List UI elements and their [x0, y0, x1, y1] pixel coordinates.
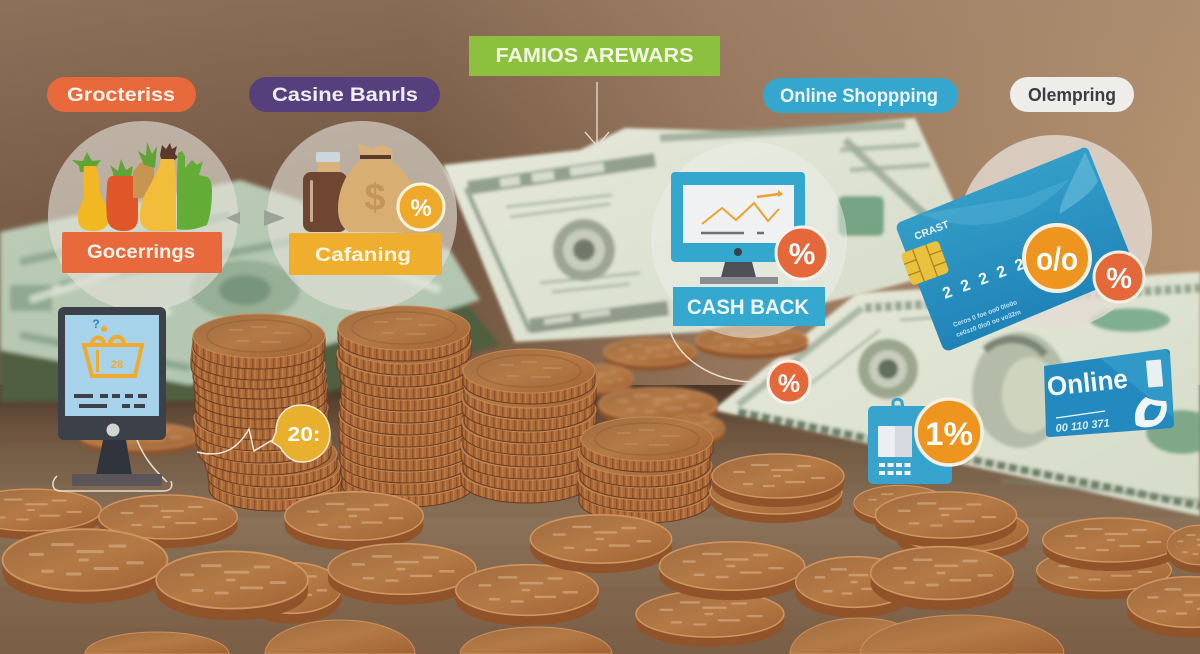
- credit card: Ceros 0 foe oo0 0lo0o: [952, 299, 1018, 329]
- icon: jar: [303, 152, 347, 232]
- badge: large percent: [1024, 225, 1090, 291]
- heading banner: [469, 36, 720, 76]
- wooden wall background: [0, 0, 1200, 420]
- icon: basket: ?: [92, 317, 100, 331]
- arrow: banner to bills: [585, 82, 609, 146]
- coin stack 2: [337, 306, 474, 507]
- label: gocerrings: Gocerrings: [87, 242, 195, 263]
- dollar bill: lower right: [713, 272, 1200, 516]
- pill: casino banks: [249, 77, 440, 112]
- small coin stack: [710, 454, 844, 523]
- online card: [1044, 349, 1174, 437]
- label: cafaning: Cafaning: [315, 245, 411, 266]
- pill: groceries: [47, 77, 196, 112]
- callout: coin price bubble: 20:: [288, 424, 320, 446]
- coin stack 1: [191, 314, 341, 511]
- credit card: ce0sz0 0lo0 oo vo32m: [955, 309, 1022, 339]
- icon: calculator with 1% badge: [868, 399, 982, 484]
- panel: groceries circle: [48, 121, 238, 311]
- badge: 1 percent: 1%: [925, 416, 973, 452]
- pill: olempring: Olempring: [1028, 85, 1116, 105]
- label: cash back: [673, 287, 825, 326]
- arrows between circles: [226, 210, 285, 226]
- label: cafaning: [289, 233, 442, 275]
- icon: basket: [84, 317, 142, 376]
- callout: coin price bubble: [197, 405, 330, 462]
- badge: percent: [398, 184, 444, 230]
- badge: red percent: %: [1106, 263, 1132, 295]
- icon: basket: 28: [111, 359, 123, 371]
- credit card: CRAST: [913, 218, 951, 243]
- loose coins: [0, 485, 1200, 654]
- badge: percent: [776, 227, 828, 279]
- online card: Online: [1045, 364, 1129, 402]
- panel: casino circle: [267, 121, 457, 311]
- icon: money bag: $: [364, 177, 386, 219]
- panel: credit card circle: [897, 135, 1152, 350]
- badge: red percent: [1094, 252, 1144, 302]
- badge: percent: %: [410, 195, 432, 222]
- coin stack 4: [578, 417, 713, 523]
- coin stack 3: [461, 349, 596, 503]
- credit card: 2 2 2 2 2 2 2: [940, 241, 1066, 303]
- credit card: [897, 148, 1135, 350]
- background blurred coins: [81, 327, 808, 455]
- label: cash back: CASH BACK: [687, 296, 809, 319]
- pill: groceries: Grocteriss: [67, 85, 175, 106]
- badge: percent small: [768, 361, 810, 403]
- icon: shopping monitor: [53, 307, 172, 491]
- icon: vegetables: [72, 142, 212, 231]
- label: gocerrings: [62, 232, 222, 273]
- badge: percent small: %: [778, 370, 800, 398]
- dollar bill: left: [0, 180, 500, 402]
- card chip: [900, 240, 950, 286]
- online card: 00 110 371: [1055, 417, 1110, 435]
- panel: cash back circle: [651, 142, 847, 382]
- wooden table: [0, 385, 1200, 654]
- monitor text lines: [74, 396, 147, 406]
- icon: money bag: [338, 144, 417, 232]
- pill: olempring: [1010, 77, 1134, 112]
- pill: online shopping: Online Shoppping: [780, 86, 938, 107]
- badge: large percent: o/o: [1036, 241, 1078, 277]
- badge: percent: %: [789, 238, 815, 271]
- pill: casino banks: Casine Banrls: [272, 85, 418, 106]
- heading banner: FAMIOS AREWARS: [496, 45, 694, 67]
- icon: chart monitor: [671, 172, 805, 284]
- dollar bill: centre: [443, 118, 982, 342]
- pill: online shopping: [763, 78, 958, 113]
